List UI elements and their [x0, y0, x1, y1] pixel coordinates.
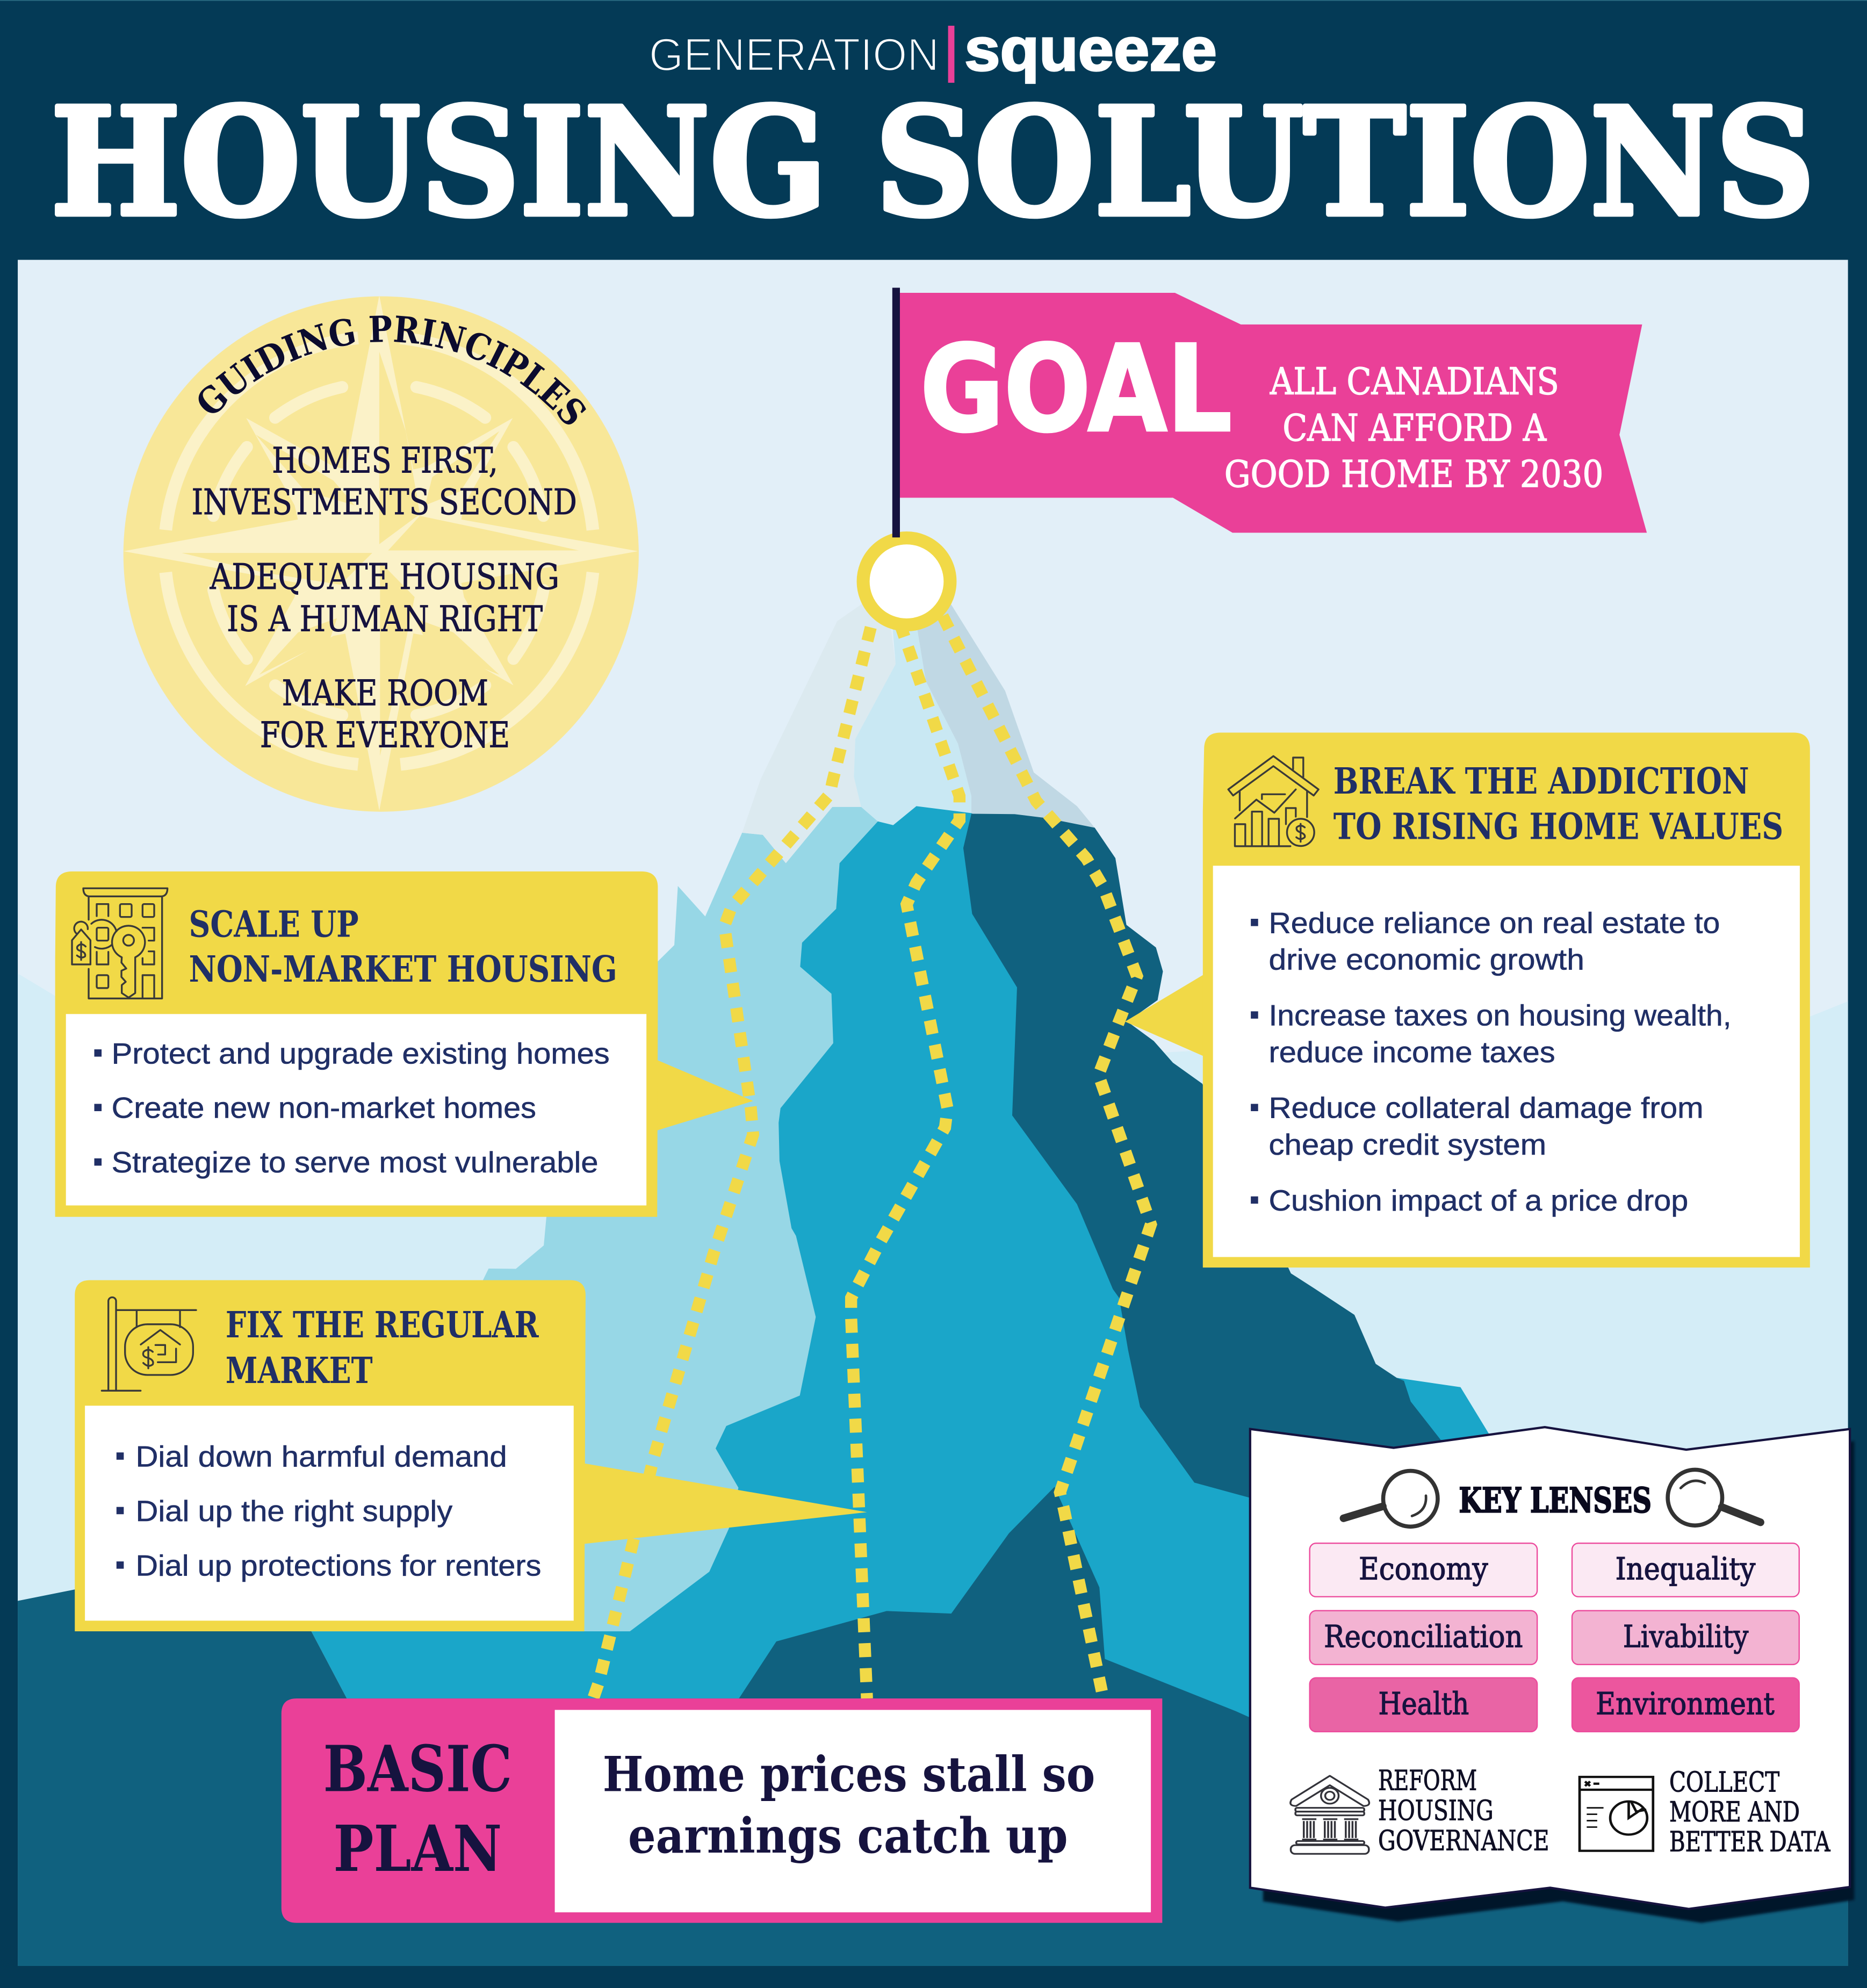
card heading — [189, 903, 617, 990]
header logo — [649, 15, 1217, 83]
logo divider — [948, 26, 954, 83]
principles text: HOMES FIRST, — [272, 440, 498, 481]
card: fix the regular market — [75, 1280, 867, 1631]
guiding principles compass: GUIDING PRINCIPLES — [199, 315, 586, 424]
lens: reconciliation: Reconciliation — [1324, 1619, 1523, 1655]
compass rose — [124, 296, 638, 811]
lens: inequality — [1572, 1543, 1799, 1597]
lens: economy: Economy — [1359, 1551, 1488, 1587]
bullet list — [95, 1038, 610, 1179]
bullet list: Dial down harmful demand — [135, 1440, 507, 1473]
lens: environment: Environment — [1596, 1687, 1775, 1722]
icon: hanging sign — [102, 1297, 196, 1391]
card heading: FIX THE REGULAR — [226, 1303, 539, 1346]
bullet list: Create new non-market homes — [112, 1092, 536, 1125]
card heading: MARKET — [226, 1349, 373, 1392]
plan label: PLAN — [333, 1811, 502, 1886]
card body — [85, 1406, 574, 1620]
plan statement: Home prices stall so — [603, 1746, 1095, 1803]
reform text — [1378, 1765, 1549, 1857]
card heading — [1333, 760, 1783, 848]
lens: inequality: Inequality — [1616, 1551, 1755, 1587]
logo squeeze wordmark: squeeze — [964, 15, 1217, 83]
lens: health — [1310, 1678, 1537, 1732]
goal statement: ALL CANADIANS — [1270, 361, 1559, 404]
principles text: ADEQUATE HOUSING — [210, 557, 559, 597]
bullet list: drive economic growth — [1268, 944, 1584, 976]
plan body — [555, 1710, 1151, 1912]
dotted climbing routes — [593, 616, 1151, 1698]
principles text — [191, 440, 577, 755]
logo generation wordmark: GENERATION — [649, 29, 939, 80]
principles text: IS A HUMAN RIGHT — [227, 599, 543, 639]
bullet list: Strategize to serve most vulnerable — [112, 1147, 599, 1179]
lens: livability: Livability — [1623, 1619, 1748, 1655]
guiding principles compass — [124, 296, 639, 812]
plan label: BASIC — [323, 1731, 512, 1806]
card heading: NON-MARKET HOUSING — [189, 948, 617, 990]
lens: economy — [1310, 1543, 1537, 1597]
card heading: TO RISING HOME VALUES — [1333, 805, 1783, 848]
card frame — [75, 1280, 586, 1631]
icon: right magnifier — [1668, 1470, 1761, 1525]
principles text: MAKE ROOM — [282, 673, 488, 714]
lens: livability — [1572, 1611, 1799, 1665]
card body — [1213, 866, 1800, 1257]
collect text: MORE AND — [1669, 1796, 1800, 1828]
goal word: GOAL — [920, 320, 1232, 459]
key lenses heading: KEY LENSES — [1459, 1480, 1652, 1521]
map shadow — [1263, 1441, 1854, 1923]
bullet list: Reduce collateral damage from — [1268, 1092, 1704, 1125]
goal statement: GOOD HOME BY 2030 — [1224, 453, 1603, 496]
icon: data window — [1580, 1777, 1653, 1851]
flag pole — [892, 288, 900, 537]
map sheet — [1250, 1427, 1850, 1909]
bullet list: Reduce reliance on real estate to — [1268, 907, 1720, 939]
bullet list: Protect and upgrade existing homes — [112, 1038, 610, 1070]
card: scale up non-market housing — [55, 871, 753, 1217]
plan label — [323, 1731, 512, 1886]
card heading: SCALE UP — [189, 903, 359, 945]
plan statement: earnings catch up — [628, 1808, 1068, 1864]
curved heading — [212, 342, 570, 429]
goal statement — [1224, 361, 1603, 496]
lens: reconciliation — [1310, 1611, 1537, 1665]
bullet list: Cushion impact of a price drop — [1268, 1185, 1688, 1217]
icon: government building — [1291, 1776, 1369, 1854]
card heading: BREAK THE ADDICTION — [1333, 760, 1749, 802]
pointer — [573, 1461, 867, 1545]
goal flag — [892, 288, 1647, 537]
card: break the addiction — [1125, 733, 1810, 1267]
icon: house with chart — [1228, 756, 1318, 846]
icon: building with key — [72, 888, 168, 998]
lens: environment — [1572, 1678, 1799, 1732]
key lenses map panel — [1250, 1427, 1854, 1923]
bullet list: reduce income taxes — [1268, 1036, 1555, 1069]
reform text: REFORM — [1378, 1765, 1477, 1797]
pointer — [1125, 969, 1213, 1060]
card frame — [55, 871, 658, 1217]
bullet list: Dial up protections for renters — [135, 1550, 541, 1582]
summit circle — [863, 538, 950, 625]
compass disc — [124, 296, 639, 812]
icon: left magnifier — [1344, 1471, 1438, 1526]
plan frame — [282, 1698, 1162, 1923]
reform text: GOVERNANCE — [1378, 1825, 1549, 1857]
basic plan panel — [282, 1698, 1162, 1923]
bullet list: Increase taxes on housing wealth, — [1268, 1000, 1732, 1032]
card frame — [1203, 733, 1810, 1267]
principles text: INVESTMENTS SECOND — [191, 482, 577, 523]
bullet list: cheap credit system — [1268, 1129, 1546, 1161]
pointer — [646, 1055, 753, 1134]
bullet list — [117, 1440, 541, 1582]
lens: health: Health — [1379, 1687, 1469, 1722]
card heading — [226, 1303, 539, 1392]
plan statement — [603, 1746, 1095, 1864]
flag banner — [900, 293, 1647, 533]
card body — [66, 1014, 646, 1205]
reform text: HOUSING — [1378, 1795, 1494, 1827]
collect text — [1669, 1767, 1830, 1858]
bullet list: Dial up the right supply — [135, 1495, 453, 1528]
goal statement: CAN AFFORD A — [1282, 407, 1547, 450]
principles text: FOR EVERYONE — [260, 715, 510, 755]
bullet list — [1251, 907, 1732, 1217]
collect text: COLLECT — [1669, 1767, 1779, 1799]
